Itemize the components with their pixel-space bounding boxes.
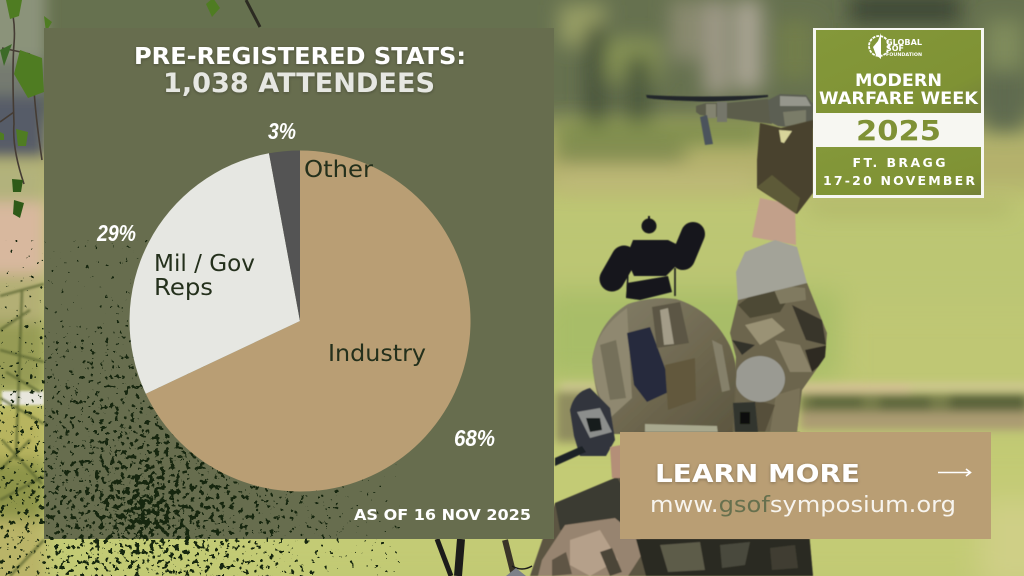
left foliage xyxy=(0,0,260,576)
helmet xyxy=(592,298,736,434)
gloved hand and forearm xyxy=(752,120,813,245)
badge top panel xyxy=(816,30,981,113)
pie chart xyxy=(130,150,471,492)
slice: Mil / Gov Reps 29% xyxy=(130,153,300,394)
pie label: Mil / Gov Reps: Reps xyxy=(154,275,213,301)
heading: learn more: LEARN MORE xyxy=(655,459,860,488)
badge title: WARFARE WEEK xyxy=(819,89,979,109)
logo: Global SOF Foundation xyxy=(869,33,922,59)
heading: PRE-REGISTERED STATS: xyxy=(134,44,466,70)
value: 68%: 68% xyxy=(454,425,495,451)
pie label: Other: Other xyxy=(304,157,374,183)
heading: 1,038 ATTENDEES xyxy=(163,68,435,99)
badge frame xyxy=(813,28,984,198)
heading xyxy=(134,44,466,99)
poles and cable below panel xyxy=(437,539,532,576)
event badge: Modern Warfare Week 2025 xyxy=(813,28,984,198)
logo: Global SOF Foundation: FOUNDATION xyxy=(886,52,922,58)
badge title: MODERN xyxy=(855,71,942,91)
website url: mww.gsofsymposium.org xyxy=(650,492,956,518)
pie label: Industry: Industry xyxy=(328,341,426,367)
grunge speckle texture over panel and photo xyxy=(0,240,400,576)
headset and helmet mounts xyxy=(555,388,758,466)
logo: Global SOF Foundation: GLOBAL xyxy=(886,38,922,47)
value: 29%: 29% xyxy=(96,220,136,246)
pie label: Mil / Gov Reps: Mil / Gov xyxy=(154,251,255,277)
value: 3%: 3% xyxy=(268,118,296,144)
call to action panel xyxy=(620,432,991,539)
badge bottom panel xyxy=(816,147,981,195)
arrow xyxy=(938,469,970,476)
badge location and dates: FT. BRAGG xyxy=(852,155,946,170)
panel: pre-registered stats xyxy=(0,28,554,576)
badge title xyxy=(819,71,979,109)
logo: Global SOF Foundation: SOF xyxy=(886,44,904,53)
slice: Other 3% xyxy=(269,150,300,321)
call to action: learn more xyxy=(620,432,991,539)
badge location and dates: 17-20 NOVEMBER xyxy=(823,173,975,188)
date note: AS OF 16 NOV 2025 xyxy=(354,506,531,524)
badge location and dates xyxy=(823,155,975,188)
raised arm with camouflage sleeve xyxy=(730,240,828,432)
night vision goggles xyxy=(612,216,693,300)
badge year: 2025 xyxy=(856,115,941,147)
soldier torso xyxy=(525,430,820,576)
drone xyxy=(646,94,813,145)
slice: Industry 68% xyxy=(146,150,471,492)
panel background xyxy=(44,28,554,539)
